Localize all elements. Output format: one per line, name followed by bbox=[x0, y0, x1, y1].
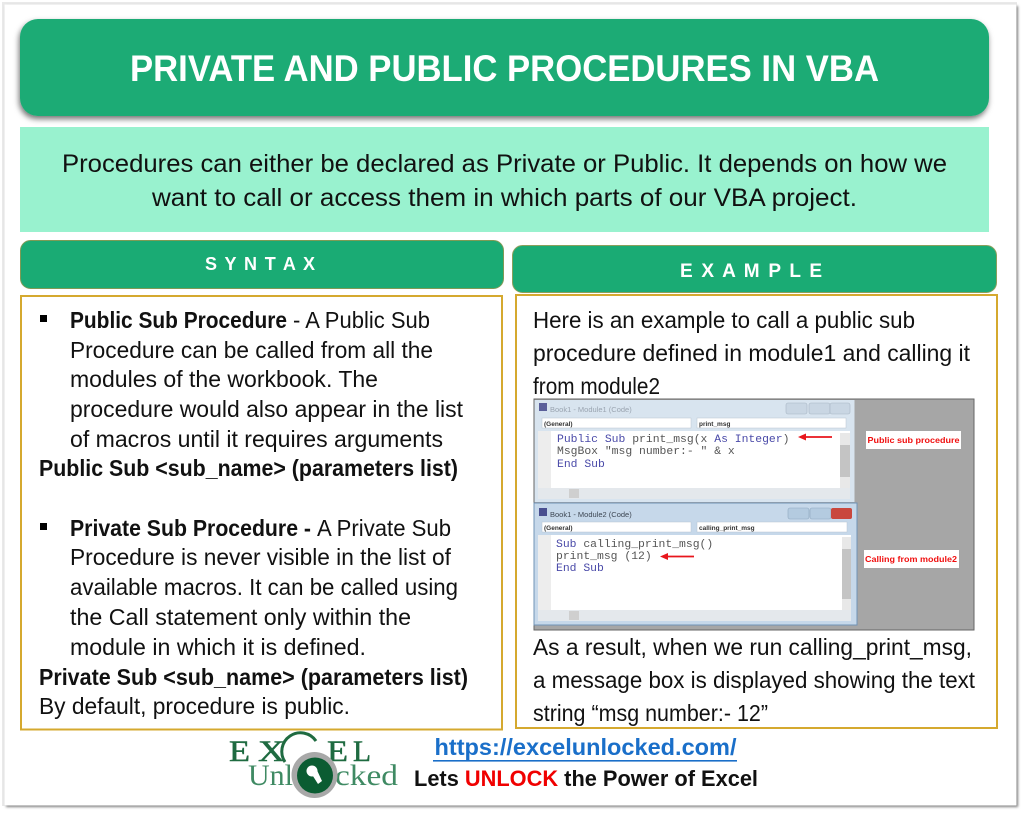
logo: Excel Unlocked: X bbox=[258, 735, 285, 768]
public sub syntax: Public Sub <sub_name> (parameters list) bbox=[39, 455, 458, 481]
example intro text: procedure defined in module1 and calling it bbox=[533, 340, 971, 366]
public sub description: of macros until it requires arguments bbox=[70, 426, 443, 452]
private sub description: available macros. It can be called using bbox=[70, 574, 458, 600]
public sub description: - A Public Sub bbox=[293, 307, 430, 333]
title banner: PRIVATE AND PUBLIC PROCEDURES IN VBA bbox=[130, 48, 879, 89]
tagline: Lets UNLOCK the Power of Excel bbox=[414, 766, 758, 791]
example intro text: Here is an example to call a public sub bbox=[533, 307, 915, 333]
syntax heading bbox=[20, 240, 504, 288]
example heading: E X A M P L E bbox=[680, 261, 822, 282]
panel: example bbox=[516, 295, 997, 728]
VBA editor screenshot bbox=[534, 399, 974, 630]
window: module2: End Sub bbox=[556, 563, 604, 575]
logo: Excel Unlocked: E bbox=[229, 735, 250, 768]
window: module1: MsgBox "msg number:- " & x bbox=[557, 446, 735, 458]
public sub description: modules of the workbook. The bbox=[70, 366, 378, 392]
private sub description: Private Sub Procedure - bbox=[70, 515, 311, 541]
arrow: calling bbox=[660, 553, 694, 560]
label: public sub procedure bbox=[866, 431, 961, 449]
window: module1: Book1 - Module1 (Code) bbox=[550, 405, 632, 414]
window: module1: End Sub bbox=[557, 459, 605, 471]
window: module1 bbox=[534, 400, 854, 502]
example result text: a message box is displayed showing the text bbox=[533, 667, 976, 693]
window: module2: print_msg (12) bbox=[556, 551, 652, 563]
window: module1: print_msg bbox=[699, 421, 730, 428]
syntax heading: S Y N T A X bbox=[205, 254, 315, 274]
private sub description bbox=[40, 515, 458, 660]
example intro text: from module2 bbox=[533, 373, 660, 399]
example result text: string “msg number:- 12” bbox=[533, 700, 768, 726]
title banner bbox=[20, 19, 989, 116]
code: module2: Sub calling_print_msg() bbox=[556, 539, 713, 551]
window: module2: calling_print_msg bbox=[699, 525, 755, 532]
example result text bbox=[533, 634, 976, 726]
arrow: public sub bbox=[798, 434, 832, 440]
website link: https://excelunlocked.com/ bbox=[434, 734, 737, 760]
panel: syntax bbox=[21, 296, 502, 730]
private sub description: module in which it is defined. bbox=[70, 634, 366, 660]
label: calling from module2: Calling from module2 bbox=[865, 554, 957, 564]
logo: Excel Unlocked: E bbox=[327, 735, 348, 768]
private sub description: the Call statement only within the bbox=[70, 604, 411, 630]
example heading bbox=[512, 246, 996, 292]
public sub description: Public Sub Procedure bbox=[70, 307, 287, 333]
window: module2 bbox=[534, 503, 857, 625]
code: module1: Public Sub print_msg(x As Integer) bbox=[557, 434, 789, 446]
example result text: As a result, when we run calling_print_msg, bbox=[533, 634, 972, 660]
window: module2: (General) bbox=[544, 525, 573, 532]
public sub description: procedure would also appear in the list bbox=[70, 396, 464, 422]
window: module1: (General) bbox=[544, 421, 573, 428]
private sub description: Procedure is never visible in the list of bbox=[70, 544, 452, 570]
example intro text bbox=[533, 307, 971, 399]
intro band bbox=[20, 127, 989, 232]
intro band: want to call or access them in which parts of our VBA project. bbox=[151, 184, 857, 212]
private sub syntax: Private Sub <sub_name> (parameters list) bbox=[39, 664, 468, 690]
logo: Excel Unlocked: L bbox=[353, 735, 371, 768]
intro band: Procedures can either be declared as Private or Public. It depends on how we bbox=[62, 150, 947, 178]
logo: Excel Unlocked: Unl bbox=[248, 759, 293, 792]
label: calling from module2 bbox=[864, 550, 959, 568]
default note: By default, procedure is public. bbox=[39, 693, 350, 719]
public sub description: Procedure can be called from all the bbox=[70, 337, 433, 363]
public sub description bbox=[40, 307, 464, 452]
window: module2: Book1 - Module2 (Code) bbox=[550, 510, 632, 519]
logo: Excel Unlocked bbox=[229, 733, 398, 798]
label: public sub procedure: Public sub procedure bbox=[868, 435, 960, 445]
logo: Excel Unlocked: cked bbox=[335, 759, 398, 792]
private sub description: A Private Sub bbox=[317, 515, 451, 541]
